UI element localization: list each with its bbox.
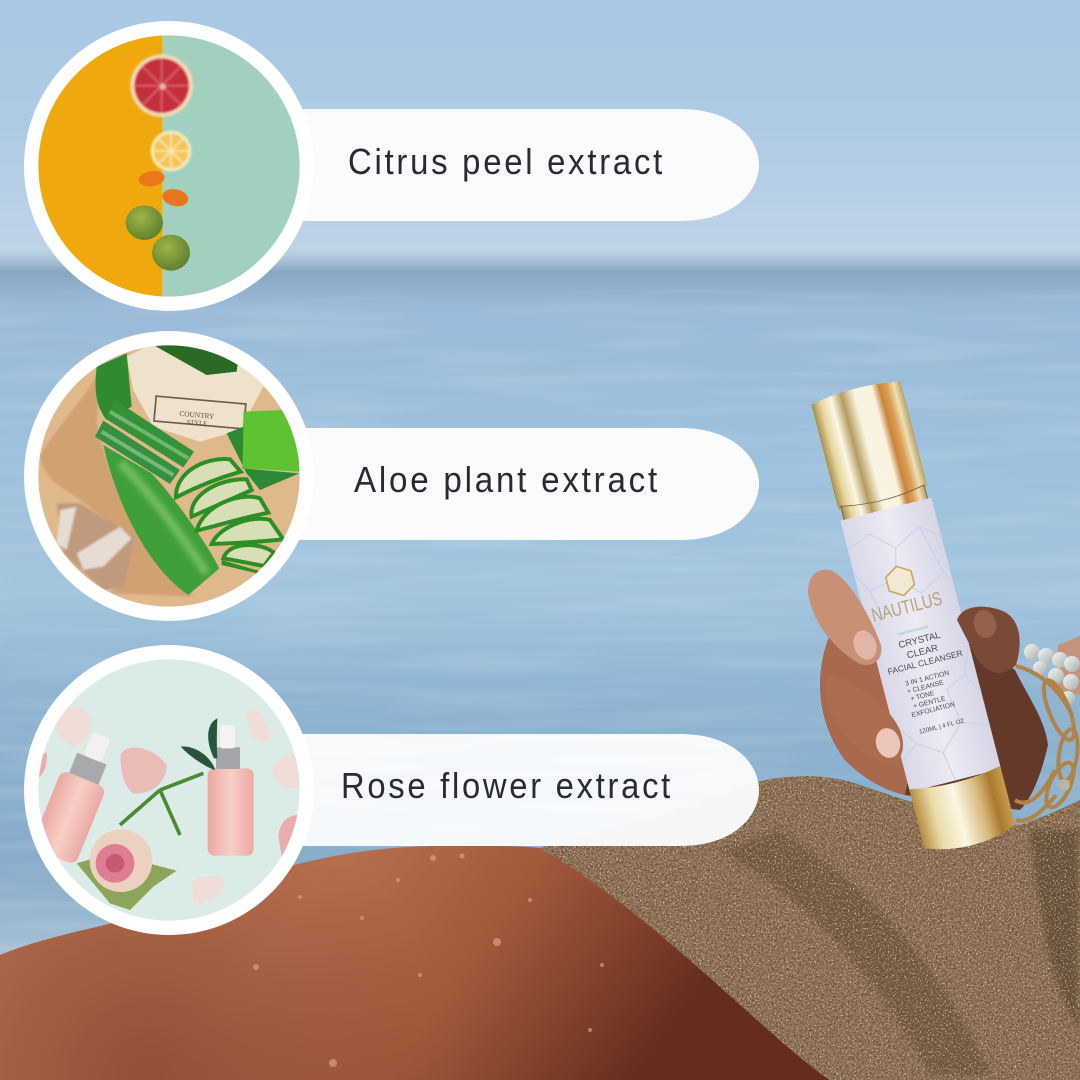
pill: aloe label: [290, 428, 759, 540]
circle photo: aloe plant: STYLE: [186, 419, 207, 428]
bottle base: [909, 766, 1018, 857]
knit dress: [530, 770, 1080, 1080]
bottle label body: + CLEANSE: [906, 679, 945, 696]
bottle label body: FACIAL CLEANSER: [887, 648, 964, 677]
bottle label body: EXFOLIATION: [911, 701, 956, 719]
hand: back of palm: [820, 620, 1048, 810]
brand name: NAUTILUS: [869, 588, 944, 627]
open rose: [77, 829, 177, 910]
leg with water droplets: [0, 846, 830, 1080]
bracelets: [1015, 636, 1080, 821]
bottle label body: [840, 498, 1001, 792]
product name: CRYSTAL: [897, 630, 942, 651]
circle photo: rose flowers and oil: [24, 645, 314, 935]
volume: 120ML | 4 FL OZ: [918, 717, 965, 736]
circle photo: aloe plant: COUNTRY: [179, 409, 215, 421]
circle photo: citrus fruits: [24, 21, 314, 311]
bottle label body: CLEAR: [906, 643, 939, 661]
right dropper bottle: [181, 718, 254, 856]
text: citrus: Citrus peel extract: [348, 141, 665, 182]
brand emblem: [884, 563, 916, 599]
bottle label body: + TONE: [910, 690, 936, 703]
left dropper bottle: [42, 733, 110, 863]
bottle cap: [810, 377, 928, 513]
text: rose: Rose flower extract: [341, 765, 673, 806]
pill: rose label: [290, 734, 759, 846]
pink rosebud: [120, 747, 203, 835]
product bottle: [809, 377, 1018, 857]
text: aloe: Aloe plant extract: [354, 459, 660, 500]
edge roses: [37, 753, 298, 857]
bottle label body: + GENTLE: [913, 695, 947, 710]
circle photo: aloe plant: [24, 331, 314, 621]
hand: fingers and thumb: [808, 570, 1020, 763]
pill: citrus label: [290, 109, 759, 221]
bottle collar: [841, 485, 929, 526]
product benefits: 3 IN 1 ACTION: [904, 670, 950, 688]
